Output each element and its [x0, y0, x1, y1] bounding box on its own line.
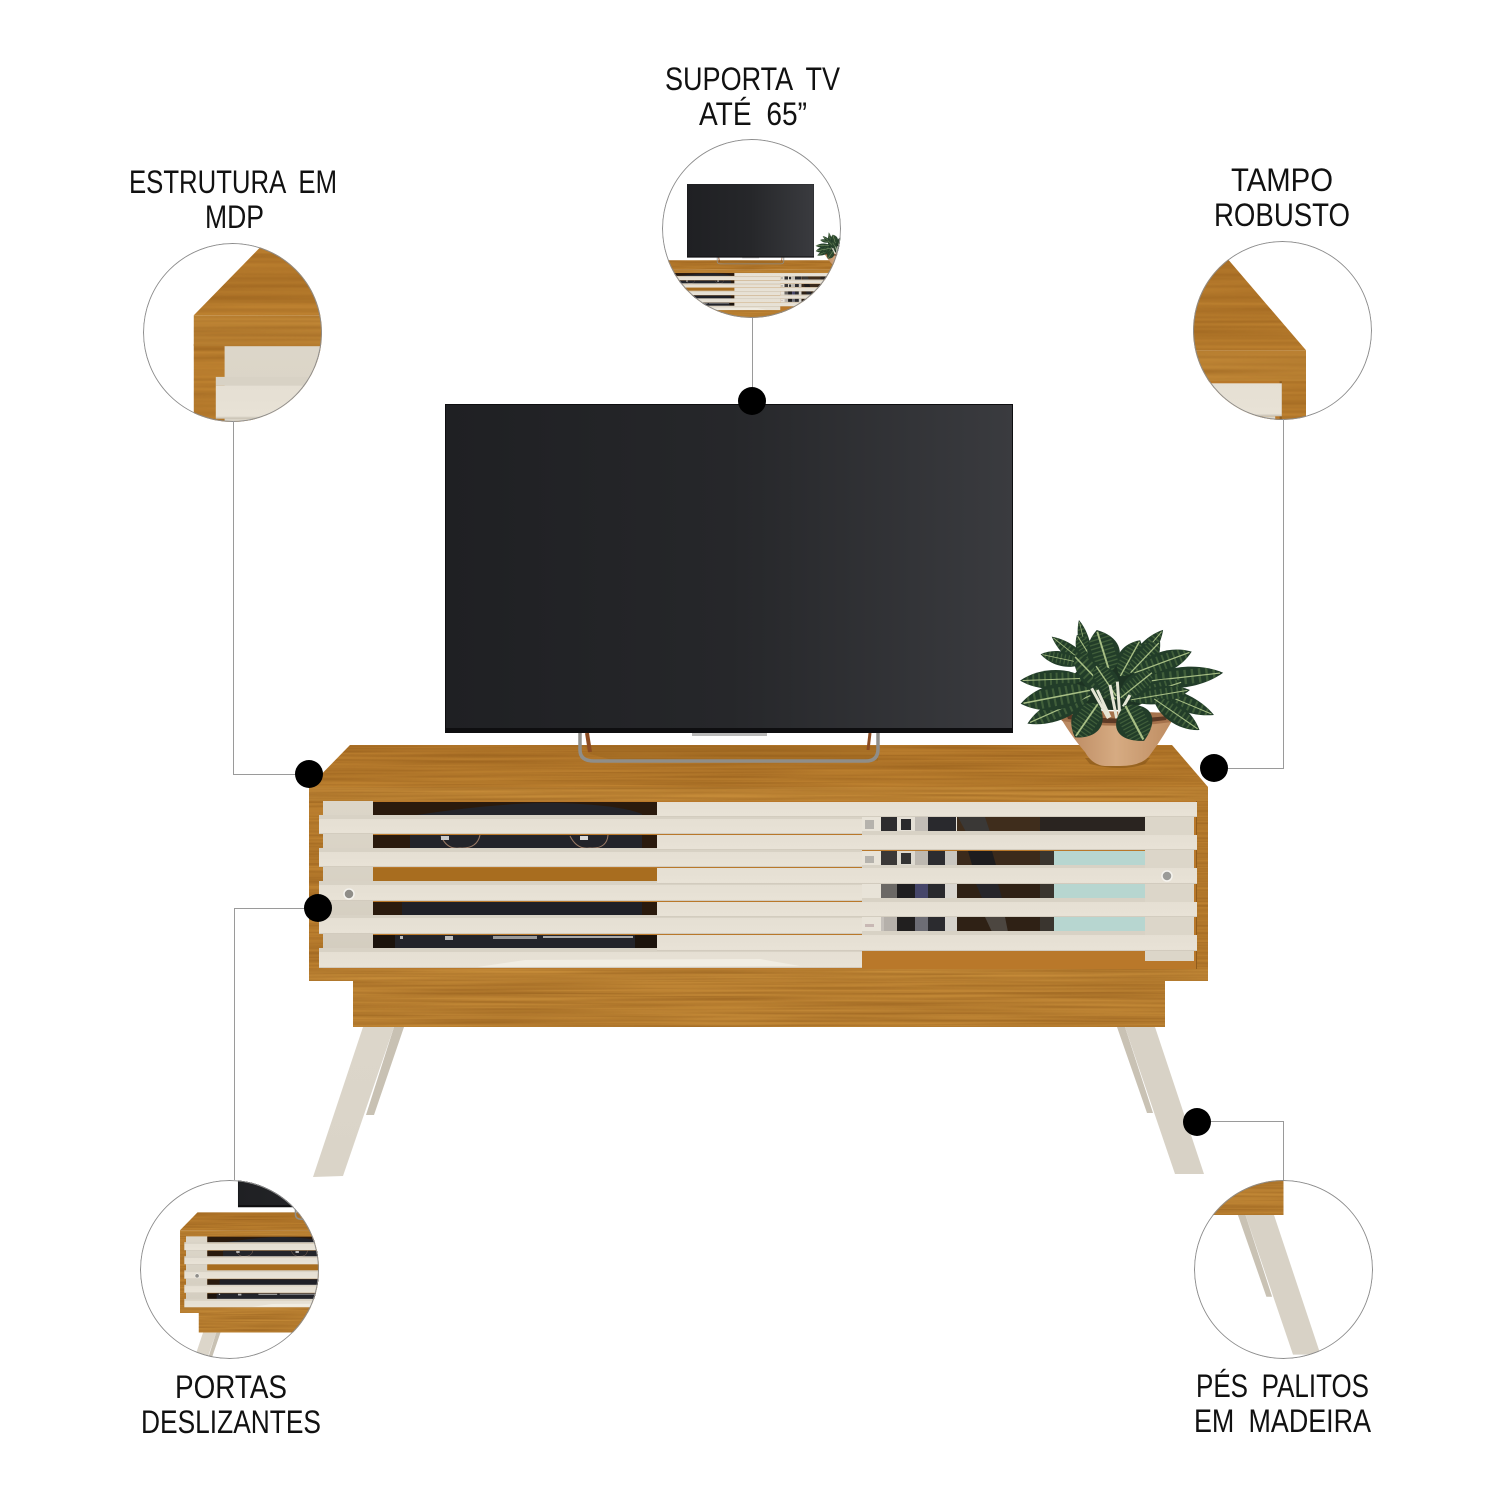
heading: estrutura em MDP: ESTRUTURA EM: [129, 164, 337, 200]
television with stand: [445, 404, 1013, 762]
heading: estrutura em MDP: MDP: [205, 199, 264, 235]
heading: portas deslizantes: [141, 1369, 321, 1440]
heading: suporta TV: SUPORTA TV: [665, 61, 841, 97]
top front edge and bottom board: [309, 787, 1208, 981]
callout connector: sliding doors: [234, 908, 318, 1180]
right opening with books: [862, 817, 1145, 932]
heading: suporta TV: [665, 61, 841, 132]
heading: tampo robusto: ROBUSTO: [1214, 197, 1350, 233]
zoom circle: MDP structure corner: [143, 242, 322, 422]
heading: pés palitos em madeira: [1194, 1368, 1372, 1439]
right door slats: [657, 802, 1197, 951]
marker dot: sliding doors: [304, 894, 332, 922]
heading: tampo robusto: [1214, 162, 1350, 233]
marker dot: wooden leg: [1183, 1108, 1211, 1136]
heading: tampo robusto: TAMPO: [1231, 162, 1333, 198]
right leg: [1117, 1027, 1204, 1174]
zoom circle: robust top corner: [1193, 240, 1372, 420]
zoom circle: TV: [662, 139, 841, 318]
left leg: [313, 1027, 404, 1177]
heading: portas deslizantes: PORTAS: [175, 1369, 287, 1405]
callout connector: wooden leg: [1197, 1122, 1284, 1180]
callout connector: robust top: [1214, 419, 1284, 768]
callout connector: TV: [752, 318, 754, 400]
zoom circle: sliding doors: [140, 1180, 319, 1359]
heading: portas deslizantes: DESLIZANTES: [141, 1404, 321, 1440]
heading: pés palitos em madeira: EM MADEIRA: [1194, 1403, 1372, 1439]
heading: suporta TV: ATÉ 65”: [699, 96, 807, 132]
marker dot: TV: [738, 387, 766, 415]
callout connector: MDP structure: [234, 421, 309, 774]
marker dot: robust top: [1200, 754, 1228, 782]
heading: pés palitos em madeira: PÉS PALITOS: [1196, 1368, 1369, 1404]
potted plant: [1018, 619, 1224, 768]
zoom circle: wooden leg: [1194, 1180, 1372, 1359]
left door slats: [319, 815, 862, 968]
heading: estrutura em MDP: [129, 164, 337, 235]
furniture: TV stand: [309, 745, 1208, 1177]
cabinet interior and side panels: [309, 800, 1208, 981]
table top: [309, 745, 1208, 787]
marker dot: MDP structure: [295, 760, 323, 788]
wooden base: [353, 979, 1165, 1027]
left opening with stored items: [373, 802, 657, 949]
door handles: [344, 871, 1172, 899]
